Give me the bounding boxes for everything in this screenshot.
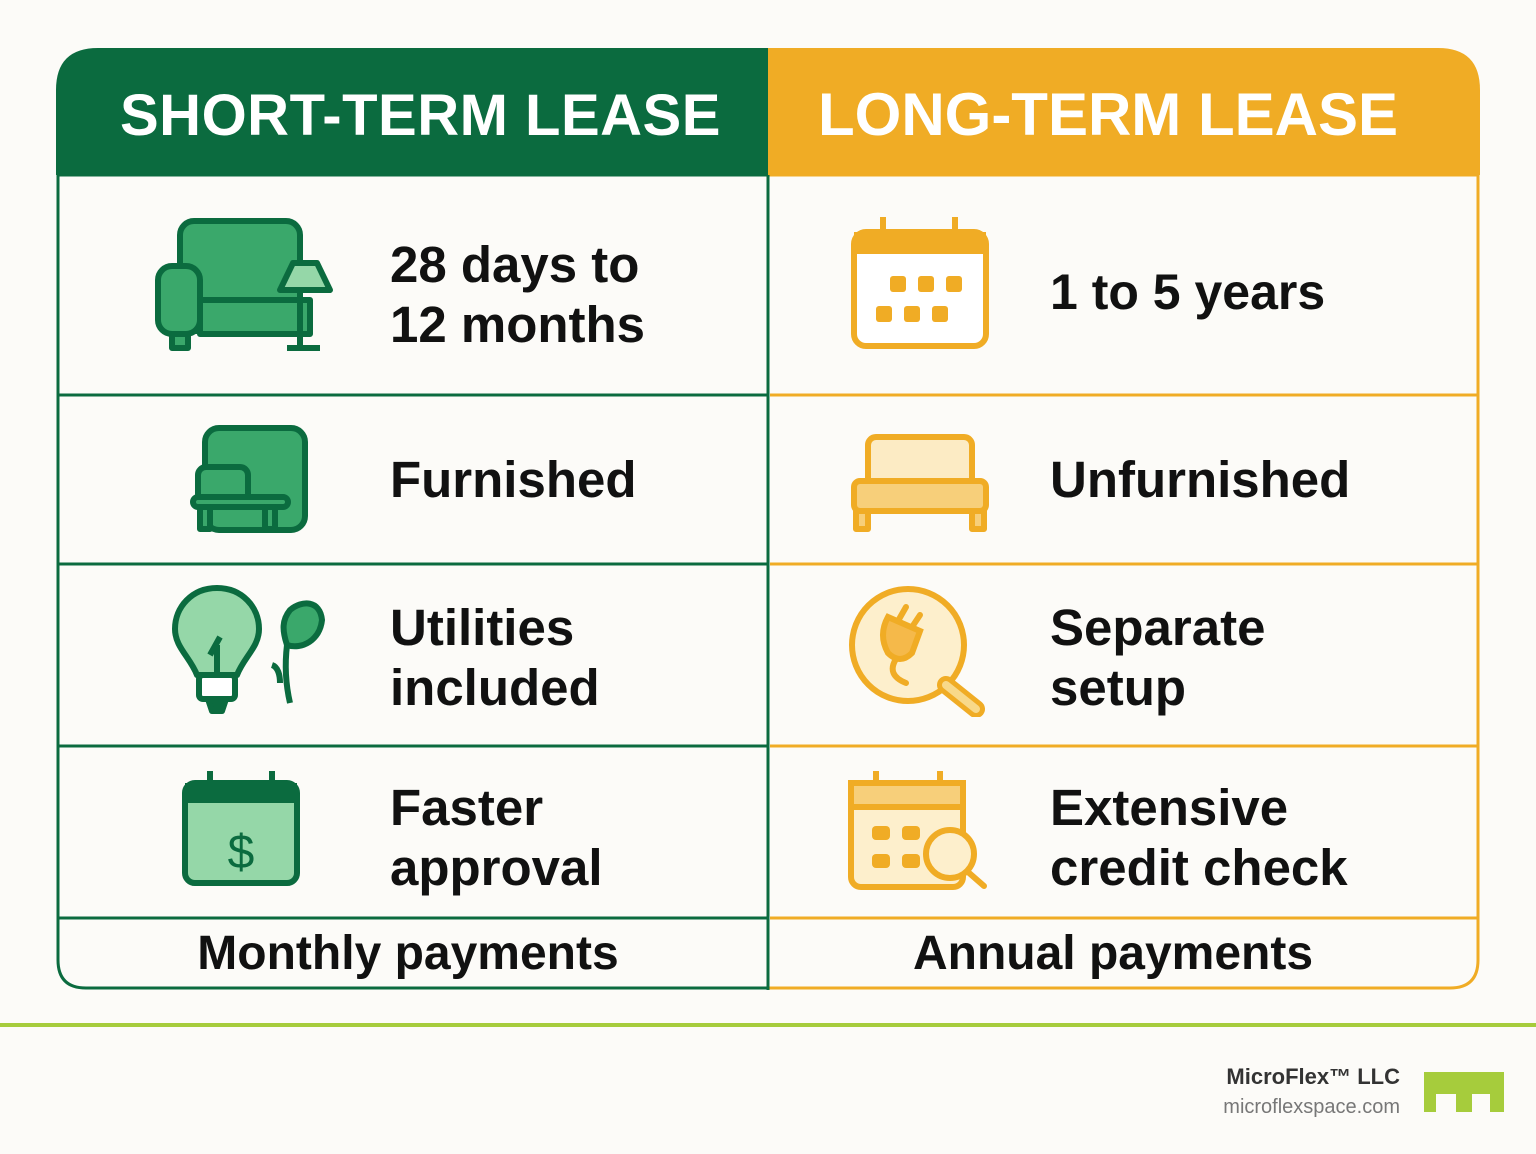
text: 28 days to 12 months: 28 days to [390,236,639,293]
text: 28 days to 12 months [390,236,645,353]
footer line [0,1023,1536,1027]
icon: bulb and leaf [172,585,325,714]
icon: plug magnifier [849,586,985,717]
text: Annual payments: Annual payments [913,927,1313,980]
text: Extensive credit check: Extensive [1050,779,1288,836]
footer: company [1223,1064,1400,1118]
footer: company: MicroFlex™ LLC [1226,1064,1400,1089]
text: 28 days to 12 months: 12 months [390,296,645,353]
text: Faster approval: approval [390,839,603,896]
text: 1 to 5 years: 1 to 5 years [1050,264,1325,320]
text: Faster approval [390,779,603,896]
icon: logo [1424,1072,1504,1112]
icon: calendar search [848,771,987,890]
text: Separate setup: setup [1050,659,1186,716]
icon: calendar dollar [182,771,300,886]
text: Extensive credit check: credit check [1050,839,1348,896]
footer: company: microflexspace.com [1223,1096,1400,1118]
text: Utilities included [390,599,600,716]
text: Unfurnished: Unfurnished [1050,451,1350,508]
text: Monthly payments: Monthly payments [197,927,619,980]
text: Furnished: Furnished [390,451,637,508]
heading: short-term lease: SHORT-TERM LEASE [120,83,721,148]
icon: bed [851,434,989,532]
text: Utilities included: included [390,659,600,716]
text: Extensive credit check [1050,779,1348,896]
text: Separate setup: Separate [1050,599,1265,656]
text: Faster approval: Faster [390,779,543,836]
text: Utilities included: Utilities [390,599,574,656]
icon: armchair [190,425,308,533]
text: Separate setup [1050,599,1265,716]
icon: sofa with lamp [155,218,333,351]
heading: long-term lease: LONG-TERM LEASE [818,81,1398,148]
icon: calendar dollar: $ [228,826,254,879]
icon: calendar [851,217,989,349]
